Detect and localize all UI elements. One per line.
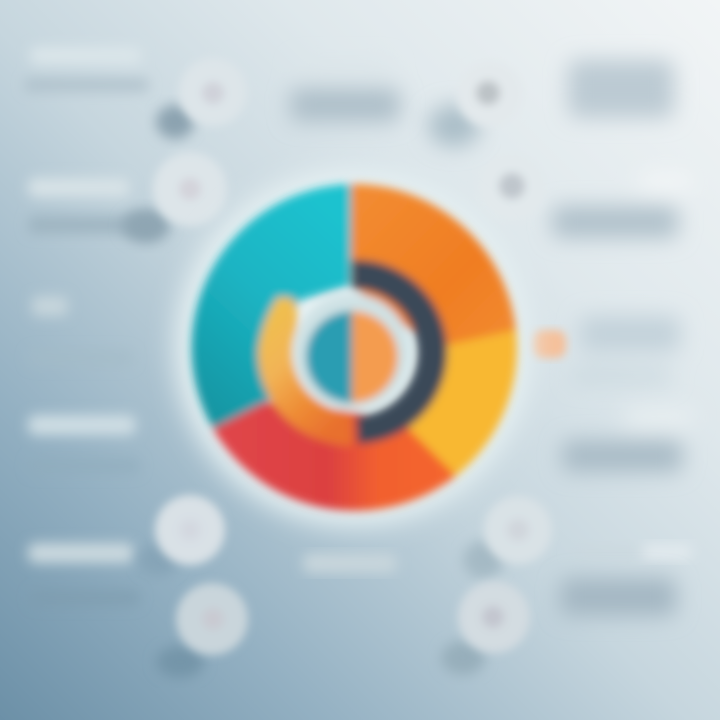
icon 2 — [153, 152, 227, 226]
shadow 8 — [441, 641, 485, 675]
right text 2 — [552, 174, 692, 238]
inner light ring — [294, 294, 410, 410]
shadow 2 — [122, 209, 170, 243]
right text 5 body — [560, 578, 676, 616]
center right half — [352, 311, 398, 403]
label 5 — [28, 543, 140, 606]
outer segment: teal — [192, 184, 351, 429]
outer segment: red — [213, 402, 456, 511]
right text 3 — [572, 316, 680, 384]
right text 5 — [570, 544, 692, 560]
icon 3 — [457, 61, 523, 127]
center left half — [306, 311, 352, 403]
inner ring: yellow to orange — [258, 297, 352, 446]
shadow 3 — [428, 105, 480, 147]
icon 4 — [478, 153, 546, 221]
shadow 6 — [156, 646, 204, 678]
icon 5 — [155, 495, 225, 565]
icon 1 — [179, 58, 247, 126]
top right text — [568, 60, 674, 118]
label 4 — [28, 415, 140, 474]
shadow 7 — [463, 541, 503, 579]
icon 8 — [458, 581, 530, 653]
outer segment: yellow — [400, 330, 517, 476]
panel: circle icons — [122, 58, 566, 678]
icon 6 — [176, 583, 248, 655]
bottom center text — [303, 553, 397, 573]
donut chart — [192, 184, 517, 511]
shadow 1 — [156, 105, 194, 139]
orange marker — [532, 330, 566, 358]
outer segment: orange — [351, 184, 516, 352]
icon 7 — [484, 496, 552, 564]
right text 4 — [562, 410, 693, 472]
inner ring: dark — [352, 260, 447, 444]
panel: left labels — [24, 47, 158, 606]
label 1 — [24, 47, 149, 92]
glow behind donut — [175, 170, 531, 526]
shadow 5 — [138, 544, 178, 576]
panel: center and right text blocks — [290, 60, 693, 616]
top center text — [290, 62, 400, 122]
label 2 — [28, 178, 158, 234]
label 3 — [28, 296, 133, 366]
